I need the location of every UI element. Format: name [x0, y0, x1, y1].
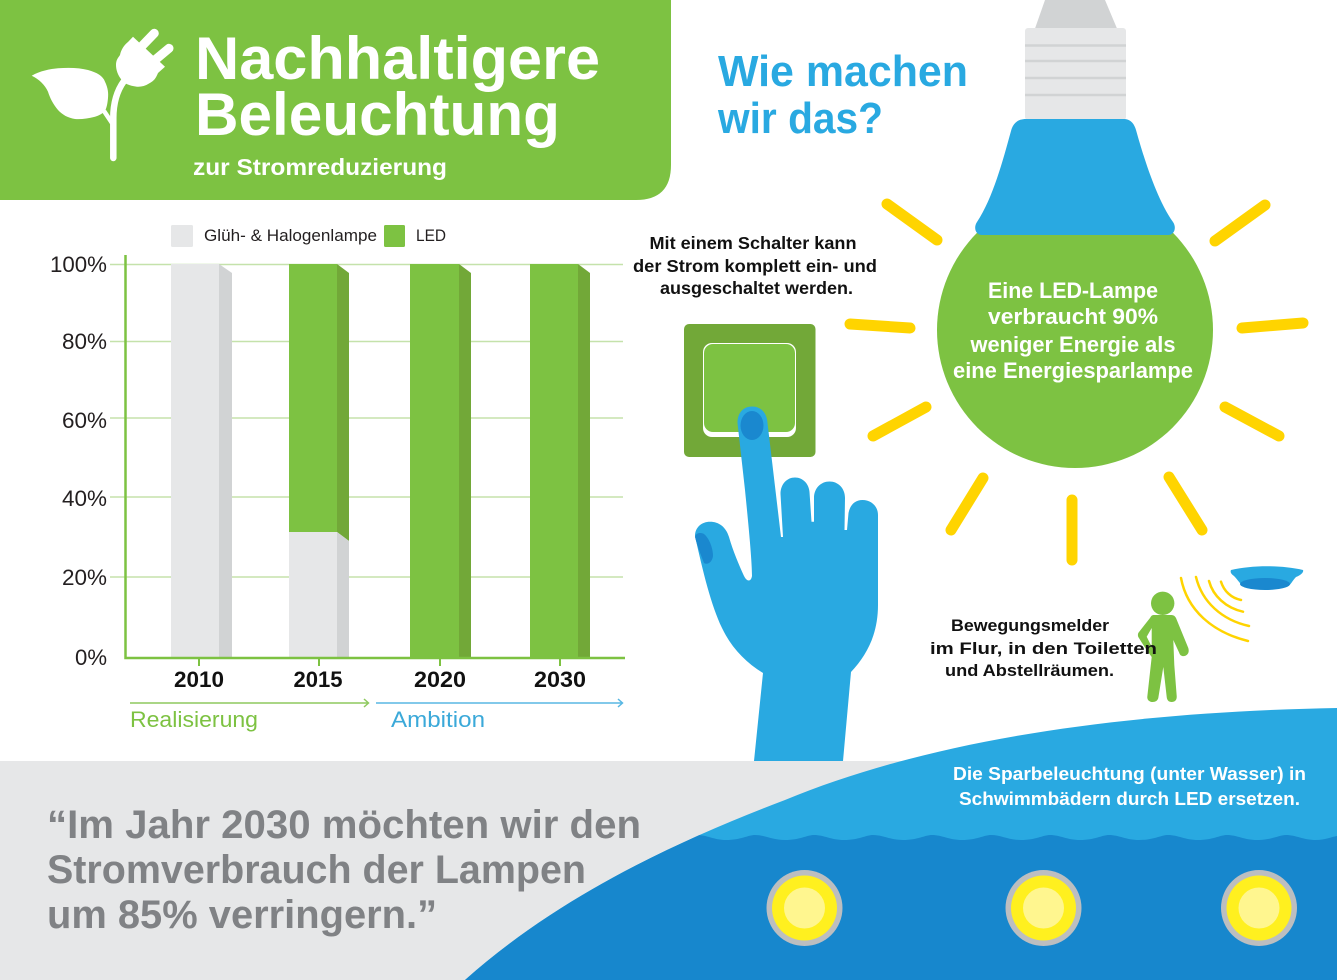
bulb neck: [975, 119, 1175, 235]
icon: bulb: [850, 0, 1303, 560]
icon: light switch: [684, 324, 816, 457]
y axis labels: [50, 252, 107, 670]
quote: “Im Jahr 2030 möchten wir den: [47, 803, 641, 847]
band: quote background: [0, 761, 1337, 980]
subtitle: zur Stromreduzierung: [193, 154, 447, 180]
icon: hand pressing switch: [695, 406, 878, 761]
title: Beleuchtung: [195, 81, 560, 148]
bar: 2010: [171, 264, 232, 657]
light rays: [850, 204, 1303, 560]
text: pool caption: Die Sparbeleuchtung (unter Wasser) in: [953, 764, 1306, 784]
panel: swimming pool: [440, 708, 1337, 980]
x axis years: [174, 667, 586, 692]
water: [440, 835, 1337, 980]
fingernail: thumb: [695, 533, 713, 564]
sensor waves: [1181, 577, 1249, 641]
arrow: Realisierung: [130, 699, 368, 732]
x axis years: 2015: [294, 667, 342, 692]
bar: 2020: [410, 264, 471, 657]
text: LED fact: eine Energiesparlampe: [953, 358, 1193, 383]
x axis years: 2010: [174, 667, 224, 692]
bulb glass: [937, 192, 1213, 468]
chart legend: LED: [416, 227, 446, 245]
y axis labels: 40%: [62, 486, 107, 511]
y axis labels: 80%: [62, 329, 107, 354]
text: switch caption: [633, 233, 877, 298]
title: [195, 25, 600, 148]
bar: 2030: [530, 264, 590, 657]
arrow: Ambition: [376, 699, 622, 732]
chart legend: [171, 225, 446, 247]
text: switch caption: ausgeschaltet werden.: [660, 278, 853, 298]
text: LED fact: Eine LED-Lampe: [988, 278, 1158, 303]
icon: person: [1138, 592, 1189, 702]
x axis years: 2030: [534, 667, 586, 692]
y axis labels: 60%: [62, 408, 107, 433]
icon: leaf and plug: [32, 33, 169, 158]
text: LED fact: [953, 278, 1193, 383]
text: switch caption: Mit einem Schalter kann: [650, 233, 856, 253]
arrow: Realisierung: Realisierung: [130, 707, 258, 732]
text: motion sensor caption: [930, 616, 1157, 680]
text: LED fact: verbraucht 90%: [988, 304, 1158, 329]
icon: motion sensor: [1181, 566, 1303, 641]
y axis labels: 100%: [50, 252, 107, 277]
fingernail: index: [740, 411, 764, 440]
y axis labels: 0%: [75, 645, 107, 670]
heading: Wie machen wir das: [717, 47, 968, 143]
header panel: [0, 0, 671, 200]
x axis years: 2020: [414, 667, 466, 692]
bulb screw thread: [1025, 28, 1126, 120]
text: motion sensor caption: und Abstellräumen.: [945, 661, 1114, 680]
arrow: Ambition: Ambition: [391, 707, 485, 732]
quote: um 85% verringern.”: [47, 893, 437, 937]
bar: 2015: [289, 264, 349, 657]
quote: Stromverbrauch der Lampen: [47, 848, 586, 892]
text: motion sensor caption: Bewegungsmelder: [951, 616, 1109, 635]
text: pool caption: [953, 764, 1306, 809]
text: pool caption: Schwimmbädern durch LED ersetzen.: [959, 789, 1300, 809]
title: Nachhaltigere: [195, 25, 600, 92]
text: LED fact: weniger Energie als: [970, 332, 1176, 357]
bulb cap: [1035, 0, 1117, 28]
text: motion sensor caption: im Flur, in den Toiletten: [930, 639, 1157, 658]
chart legend: Glüh- & Halogenlampe: [204, 227, 377, 245]
pool light 1: [766, 870, 842, 946]
y axis labels: 20%: [62, 565, 107, 590]
heading: Wie machen wir das: Wie machen: [718, 47, 968, 96]
pool light 2: [1006, 870, 1082, 946]
heading: Wie machen wir das: wir das?: [717, 94, 883, 143]
pool light 3: [1221, 870, 1297, 946]
quote: [47, 803, 641, 937]
bar chart: [50, 252, 625, 692]
text: switch caption: der Strom komplett ein- und: [633, 256, 877, 276]
